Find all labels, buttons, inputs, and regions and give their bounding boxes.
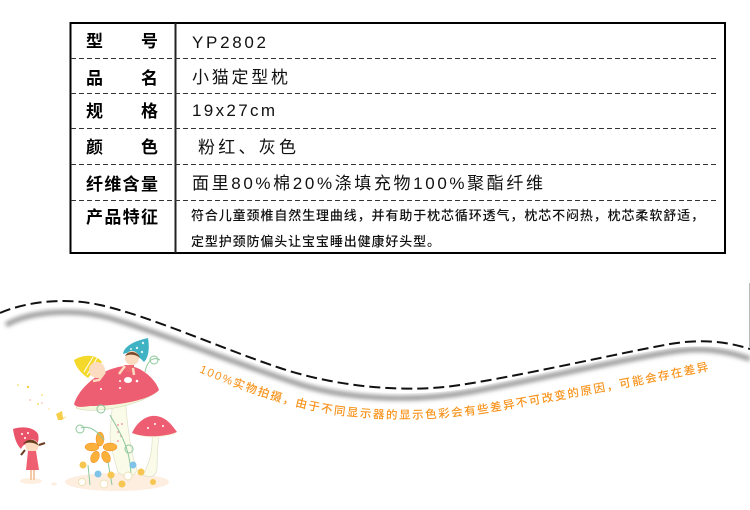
row: colour — [86, 137, 296, 157]
row: model: YP2802 — [192, 33, 266, 52]
icon: girl in red hat — [13, 427, 45, 480]
row: model: 号 — [141, 32, 158, 51]
icon: blue hat child — [119, 338, 149, 375]
row: product features: 符合儿童颈椎自然生理曲线，并有助于枕芯循环透气，枕芯不闷热，枕芯柔软舒适， — [191, 208, 704, 223]
row: product features: 定型护颈防偏头让宝宝睡出健康好头型。 — [191, 234, 440, 249]
row: product features: 产品特征 — [86, 208, 158, 227]
row: model: 型 — [86, 32, 103, 51]
row: colour: 粉红、灰色 — [198, 138, 296, 157]
row: colour: 色 — [141, 137, 158, 157]
row: colour: 颜 — [86, 138, 103, 157]
row: size: 格 — [141, 102, 158, 121]
icon: green tendrils and small flowers — [76, 356, 160, 488]
icon: yellow hat child — [74, 356, 105, 381]
row: product name: 品 — [86, 69, 103, 88]
illustration: mushrooms and children — [13, 338, 177, 491]
row: model — [86, 32, 266, 52]
row: product name — [86, 68, 288, 88]
row: product name: 名 — [141, 69, 158, 88]
row: size — [86, 101, 275, 121]
row: fibre content: 纤维含量 — [86, 174, 158, 194]
row: size: 规 — [86, 102, 103, 121]
wavy divider — [0, 264, 750, 398]
icon: large mushroom — [74, 366, 159, 476]
row: fibre content: 面里80%棉20%涤填充物100%聚酯纤维 — [192, 174, 543, 193]
icon: orange flower — [85, 432, 117, 464]
row: product name: 小猫定型枕 — [192, 68, 288, 87]
ground shadow — [20, 473, 169, 491]
curved disclaimer text: 100%实物拍摄，由于不同显示器的显示色彩会有些差异不可改变的原因，可能会存在差异 — [200, 362, 708, 420]
row: product features — [86, 208, 704, 249]
icon: butterfly and sparkles — [17, 384, 67, 420]
icon: small mushroom — [132, 416, 177, 477]
specification table — [70, 23, 725, 253]
row: size: 19x27cm — [192, 101, 275, 120]
